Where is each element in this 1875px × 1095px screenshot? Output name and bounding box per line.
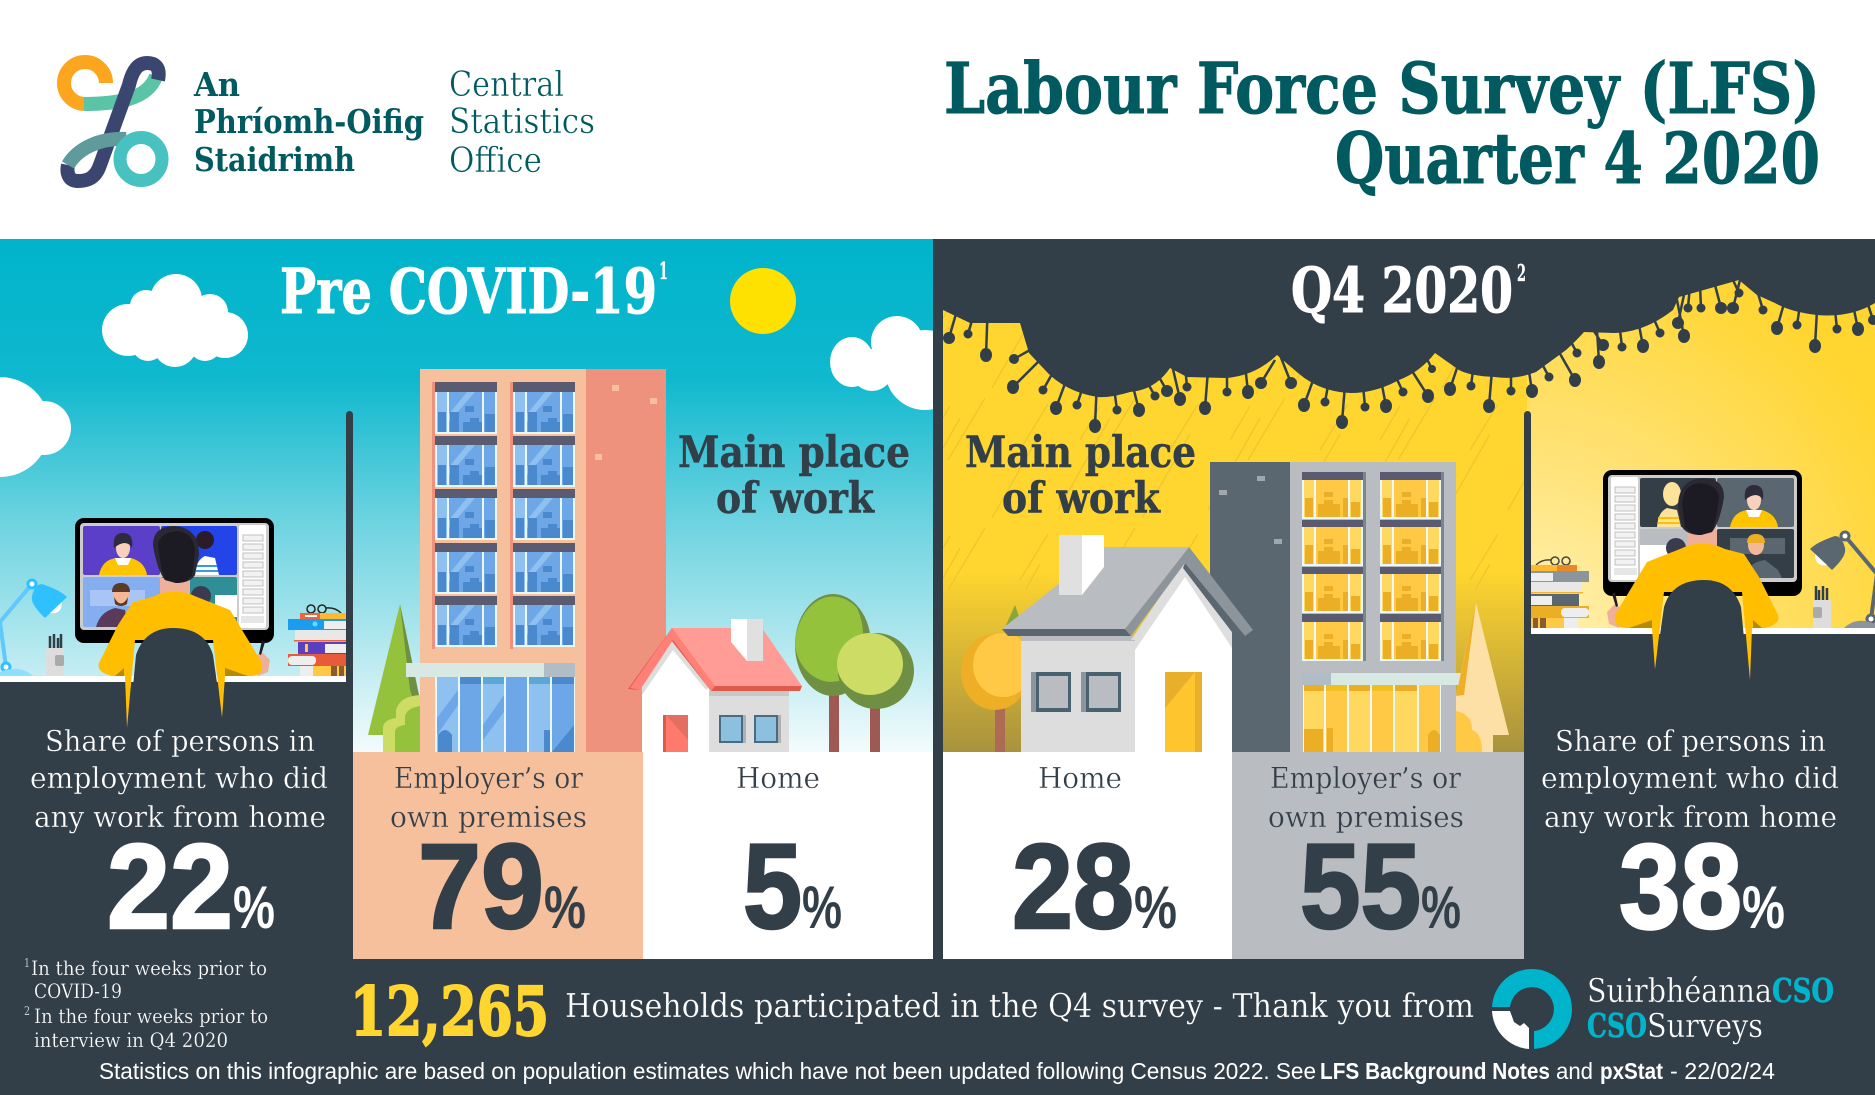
heading: Q4 2020: Q4 2020 xyxy=(1291,254,1513,327)
icon: book stack xyxy=(288,605,346,676)
illustration: right desk props xyxy=(1531,530,1875,634)
logo text: Irish name: An xyxy=(193,65,240,104)
logo text: English name xyxy=(449,65,595,181)
illustration: pale tree q4 xyxy=(1456,603,1509,752)
icon: desk lamp grey xyxy=(1810,530,1875,628)
stat box: employer's or own premises q4: Employer’s or xyxy=(1270,761,1461,795)
heading: Pre COVID-19: 1 xyxy=(659,258,668,285)
logo text: Irish name xyxy=(193,65,424,179)
stat: 22 percent: 22 xyxy=(107,818,233,954)
stat box: employer's or own premises q4 xyxy=(1232,752,1524,959)
footnotes: In the four weeks prior to xyxy=(31,956,267,980)
panel: pre COVID sky xyxy=(0,239,933,752)
icon: pen cup xyxy=(46,634,64,676)
icon: book stack xyxy=(1531,557,1589,628)
stat box: home pre covid: 5 xyxy=(743,818,802,954)
illustration: office tree pre covid xyxy=(368,604,420,752)
illustration: person at desk q4 xyxy=(1607,478,1778,687)
main place of work heading q4: Main place xyxy=(965,428,1196,478)
panel: bright yellow home sky xyxy=(1527,280,1875,630)
footer note: and xyxy=(1556,1058,1593,1084)
illustration: trees by house xyxy=(795,594,914,752)
logo text: Irish name: Phríomh-Oifig xyxy=(194,102,424,141)
illustration: left desk props xyxy=(0,578,346,682)
text: CSO Surveys brand: Suirbhéanna xyxy=(1587,971,1772,1010)
text: CSO Surveys brand: Surveys xyxy=(1647,1006,1763,1045)
footnotes: 2 xyxy=(24,1004,30,1018)
stat: 22 percent: % xyxy=(233,874,275,941)
footer note: pxStat xyxy=(1600,1058,1663,1084)
icon: cloud left xyxy=(0,377,71,477)
text: CSO Surveys brand xyxy=(1587,971,1834,1045)
stat box: home q4: Home xyxy=(1038,761,1122,795)
heading: Q4 2020: 2 xyxy=(1517,260,1526,287)
icon: desk lamp xyxy=(0,578,67,676)
illustration: office building q4 xyxy=(1210,462,1471,752)
icon: pen cup xyxy=(1813,586,1831,628)
main place of work heading pre covid: of work xyxy=(716,474,875,524)
illustration: right monitor with video call xyxy=(1603,470,1802,596)
logo text: English name: Central xyxy=(449,65,564,105)
stat box: employer's or own premises pre covid xyxy=(353,752,643,959)
stat box: home pre covid: % xyxy=(802,874,842,941)
stat box: employer's or own premises q4: own premises xyxy=(1268,800,1464,834)
illustration: office building pre covid xyxy=(406,369,666,752)
stat box: employer's or own premises pre covid: % xyxy=(544,874,586,941)
icon: CSO Surveys ring xyxy=(1492,969,1572,1049)
panel: Q4 2020 dark background xyxy=(933,239,1875,1095)
main place of work heading pre covid xyxy=(678,428,910,524)
stat box: employer's or own premises pre covid: 79 xyxy=(418,818,544,954)
title xyxy=(944,47,1820,200)
panel: right dark column with bar xyxy=(1524,411,1875,1095)
stat: 38 percent: % xyxy=(1742,874,1785,941)
logo text: English name: Office xyxy=(449,141,542,181)
stat box: employer's or own premises q4: % xyxy=(1421,874,1461,941)
panel: left dark column with bar xyxy=(0,411,933,1095)
office ground floor xyxy=(435,677,575,752)
text: share of persons pre covid xyxy=(30,724,328,834)
text: share of persons q4: any work from home xyxy=(1544,800,1837,834)
stat box: home q4: 28 xyxy=(1012,818,1134,954)
footnotes: COVID-19 xyxy=(34,979,122,1003)
text: share of persons pre covid: any work from home xyxy=(34,800,326,834)
stat box: employer's or own premises pre covid: own premises xyxy=(390,800,587,834)
stat box: home q4 xyxy=(943,752,1232,959)
panel: stormy yellow sky xyxy=(943,300,1527,752)
q4 office windows xyxy=(1302,472,1444,661)
office windows xyxy=(435,382,575,647)
text: households thank you: Households participated in the Q4 survey - Thank you from xyxy=(565,986,1474,1025)
stat: 38 percent: 38 xyxy=(1619,818,1742,954)
illustration: person at desk pre covid xyxy=(99,526,270,735)
illustration: house pre covid xyxy=(628,619,802,752)
footnotes: In the four weeks prior to xyxy=(34,1004,268,1028)
text: share of persons pre covid: Share of persons in xyxy=(45,724,315,758)
stat box: home pre covid: Home xyxy=(736,761,820,795)
logo text: Irish name: Staidrimh xyxy=(194,140,355,179)
stat box: home q4: % xyxy=(1134,874,1177,941)
footnotes: 1 xyxy=(24,956,30,970)
footer note: - 22/02/24 xyxy=(1670,1058,1775,1084)
icon: cloud top left xyxy=(102,274,248,367)
text: CSO Surveys brand: CSO xyxy=(1772,971,1834,1010)
footnotes xyxy=(24,956,268,1052)
storm cloud with drips xyxy=(943,239,1875,433)
logo text: English name: Statistics xyxy=(449,102,595,142)
q4 office awning xyxy=(1302,673,1471,685)
text: share of persons pre covid: employment who did xyxy=(30,761,328,795)
stat: households count: 12,265 xyxy=(350,972,549,1051)
illustration: house q4 xyxy=(1002,535,1253,752)
stat box: employer's or own premises pre covid: Employer’s or xyxy=(394,761,583,795)
text: share of persons q4: Share of persons in xyxy=(1555,724,1826,758)
CSO logo xyxy=(64,62,162,181)
text: share of persons q4 xyxy=(1541,724,1839,834)
q4 office ground floor xyxy=(1303,685,1441,752)
illustration: left monitor with video call xyxy=(75,518,274,643)
footer note: LFS Background Notes xyxy=(1320,1058,1550,1084)
main place of work heading q4 xyxy=(965,428,1196,524)
main place of work heading q4: of work xyxy=(1002,474,1161,524)
main place of work heading pre covid: Main place xyxy=(678,428,910,478)
footer note: Statistics on this infographic are based on population estimates which have not been updated following Census 2022. See xyxy=(99,1058,1316,1084)
stat box: employer's or own premises q4: 55 xyxy=(1300,818,1421,954)
footnotes: interview in Q4 2020 xyxy=(34,1028,228,1052)
illustration: autumn tree q4 xyxy=(961,605,1033,752)
office awning xyxy=(406,663,575,677)
icon: sun xyxy=(730,268,796,334)
stat box: home pre covid xyxy=(643,752,933,959)
text: CSO Surveys brand: CSO xyxy=(1587,1006,1647,1045)
heading: Pre COVID-19: Pre COVID-19 xyxy=(280,255,657,328)
text: share of persons q4: employment who did xyxy=(1541,761,1839,795)
icon: cloud top right xyxy=(830,316,965,410)
